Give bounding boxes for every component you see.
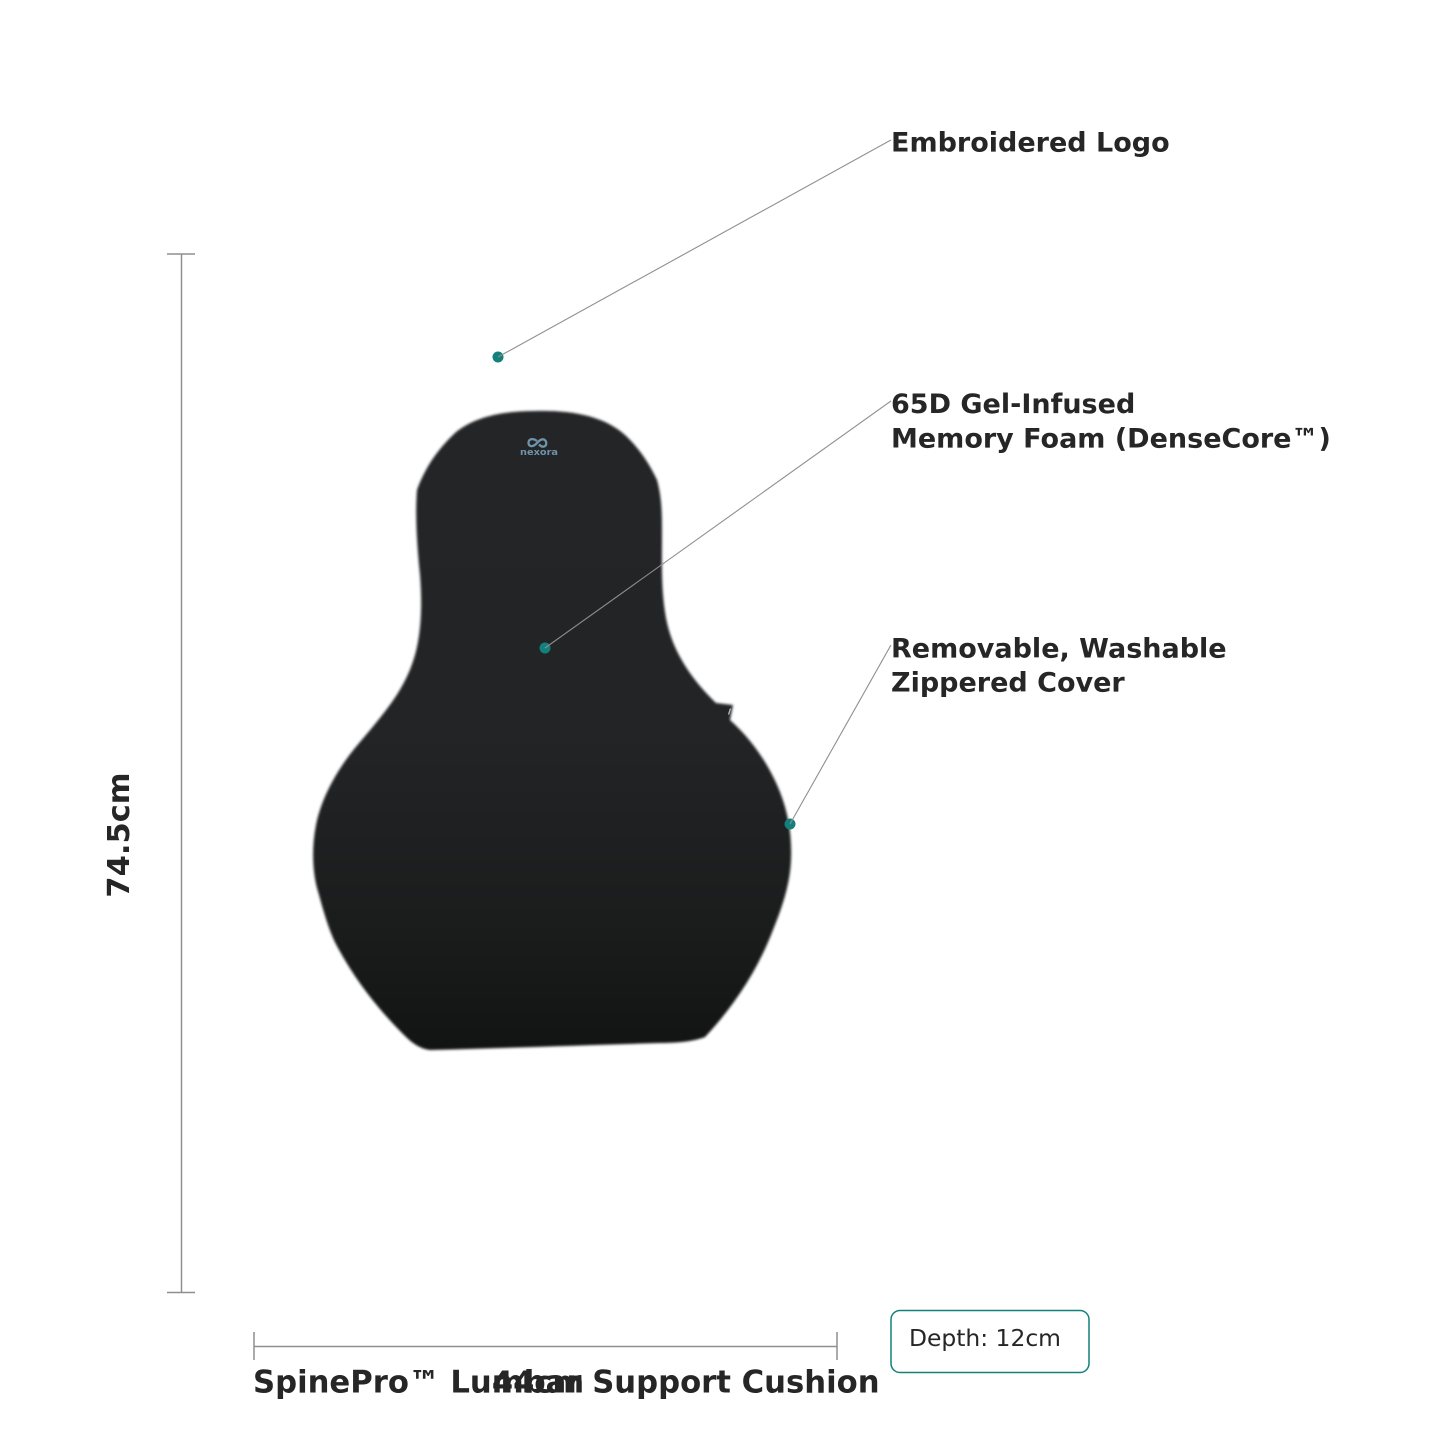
width dimension [254,1332,837,1400]
callout: memory foam [540,389,1331,654]
height dimension [102,254,195,1292]
width bracket [254,1332,837,1360]
callout: zippered cover [784,634,1227,830]
label: zippered cover: Zippered Cover [891,668,1125,698]
callout: embroidered logo [492,128,1170,362]
label: memory foam: 65D Gel-Infused [891,389,1135,420]
product title: SpinePro™ Lumbar Support Cushion [253,1366,880,1400]
label: zippered cover: Removable, Washable [891,634,1227,664]
depth label: Depth: 12cm [909,1324,1061,1352]
logo wordmark: nexora [520,448,558,458]
icon: infinity logo mark [528,439,546,447]
marker dot: logo [492,352,504,362]
marker dot: foam [540,642,550,654]
zipper pull sliver [728,708,731,715]
height label: 74.5cm [102,772,137,898]
label: embroidered logo: Embroidered Logo [891,128,1170,158]
embroidered logo [520,439,558,458]
marker dot: cover [784,818,796,830]
depth badge [891,1310,1089,1372]
height bracket [167,254,195,1292]
width label: 44cm [492,1366,584,1400]
cushion product silhouette [313,411,791,1050]
label: memory foam: Memory Foam (DenseCore™) [891,424,1331,454]
